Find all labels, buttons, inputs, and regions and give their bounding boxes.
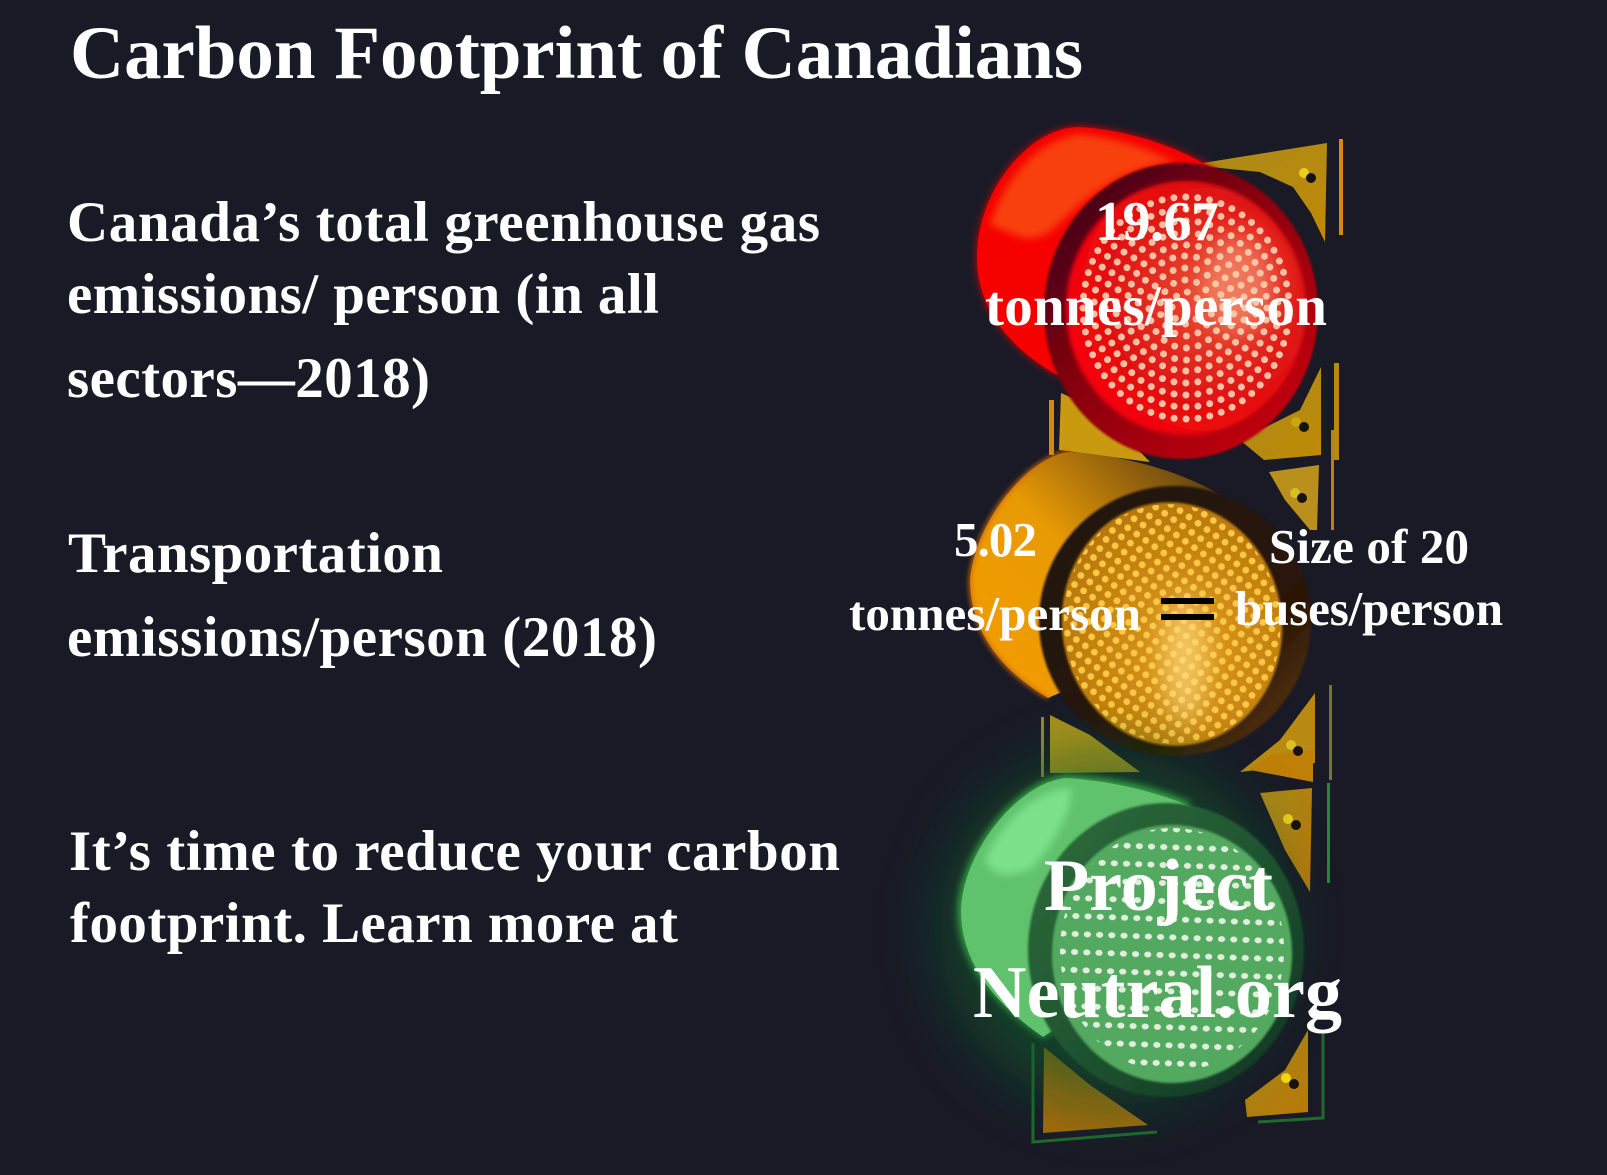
text block: total emissions: sectors—2018) [67, 347, 430, 410]
LED dot rings [1083, 197, 1289, 419]
stat: total tonnes per person: tonnes/person [985, 275, 1327, 338]
stat: transportation tonnes per person [849, 512, 1141, 641]
link text: Project Neutral: Neutral.org [973, 952, 1342, 1034]
text block: total emissions [67, 191, 820, 410]
link text: Project Neutral [973, 845, 1342, 1034]
panel: green lamp [940, 755, 1304, 1105]
LED dots [1064, 504, 1280, 744]
icon: equals sign [1161, 598, 1214, 620]
text block: call to action: footprint. Learn more at [70, 892, 678, 955]
stat: transportation tonnes per person: 5.02 [954, 512, 1037, 567]
text block: total emissions: emissions/ person (in all [67, 263, 659, 326]
text block: total emissions: Canada’s total greenhouse gas [67, 191, 820, 254]
stat: size of 20 buses: buses/person [1235, 581, 1503, 636]
stat: total tonnes per person [985, 191, 1327, 338]
panel: brackets and mounting [1033, 139, 1343, 1142]
traffic light photo [940, 127, 1343, 1142]
panel: amber lamp [970, 452, 1311, 760]
stat: transportation tonnes per person: tonnes/person [849, 586, 1141, 641]
title: Carbon Footprint of Canadians [70, 12, 1083, 95]
panel: red lamp [977, 127, 1318, 459]
text block: transportation emissions [67, 522, 657, 669]
text block: call to action: It’s time to reduce your carbon [69, 820, 840, 883]
text block: transportation emissions: emissions/person (2018) [67, 606, 657, 669]
LED dots [1060, 828, 1284, 1068]
text block: transportation emissions: Transportation [68, 522, 443, 585]
stat: size of 20 buses: Size of 20 [1269, 519, 1469, 574]
stat: total tonnes per person: 19.67 [1095, 191, 1219, 253]
stat: size of 20 buses [1235, 519, 1503, 636]
text block: call to action [69, 820, 840, 955]
link text: Project Neutral: Project [1044, 845, 1273, 927]
